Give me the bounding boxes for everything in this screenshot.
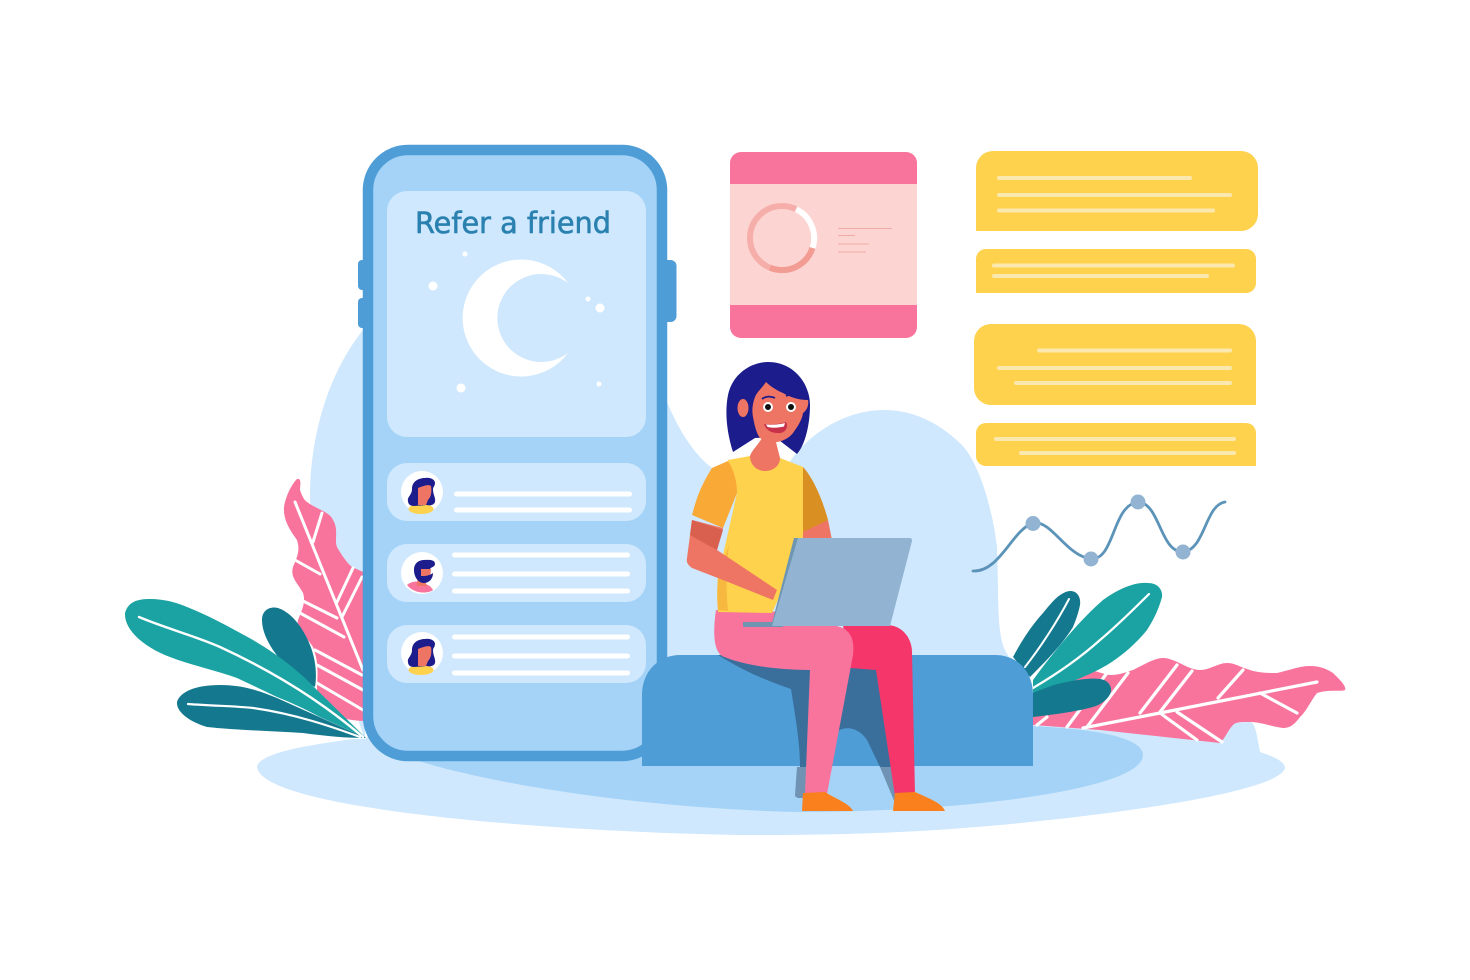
left big teal leaf (125, 599, 366, 738)
couch (642, 655, 1033, 766)
avatar: man (401, 552, 443, 594)
eyes (763, 402, 796, 412)
text lines (452, 634, 630, 676)
right teal leaf (1033, 583, 1162, 695)
avatar: woman (401, 632, 443, 675)
card body (730, 184, 917, 305)
chat bubble 3 (974, 324, 1256, 405)
phone screen panel (387, 191, 646, 437)
right low dark leaf (1033, 679, 1111, 717)
face (738, 382, 808, 442)
eyebrows (762, 395, 797, 399)
far arm (803, 520, 832, 540)
pink dashboard card (730, 152, 917, 338)
phone body (368, 150, 662, 756)
near arm (687, 520, 777, 600)
left pink leaf (284, 479, 370, 722)
floor ellipse mid (400, 726, 1143, 812)
heading: Refer a friend: Refer a friend (415, 206, 611, 240)
text lines (454, 492, 632, 512)
right dark leaf (1013, 591, 1080, 677)
avatar: woman (401, 471, 443, 514)
right pink leaf (1033, 658, 1345, 743)
floor ellipse light (257, 725, 1285, 835)
shirt (692, 456, 828, 613)
leg shadow (718, 650, 902, 803)
left low dark leaf (177, 685, 366, 738)
laptop (743, 538, 912, 627)
neck (750, 438, 780, 471)
front leg (714, 610, 853, 794)
card text lines (838, 228, 892, 252)
list row 2 (387, 544, 646, 602)
right plant (1013, 583, 1345, 743)
hair (726, 362, 810, 454)
list row 3 (387, 625, 646, 683)
icon: crescent moon (463, 260, 568, 377)
chat bubble 2 (976, 249, 1256, 293)
background blob (310, 330, 1285, 800)
phone side buttons (358, 260, 676, 328)
donut chart (750, 206, 814, 270)
back leg (843, 625, 915, 796)
woman on couch with laptop (687, 362, 945, 811)
card base with header and footer bands (730, 152, 917, 338)
chat bubble 4 (976, 423, 1256, 466)
chat bubble 1 (976, 151, 1258, 231)
line chart (973, 494, 1225, 571)
stars (428, 252, 604, 392)
left plant (125, 479, 370, 738)
text lines (452, 552, 630, 594)
phone (358, 150, 676, 756)
list row 1 (387, 463, 646, 521)
shoes (802, 792, 945, 811)
left small dark leaf (262, 608, 316, 687)
mouth (764, 422, 787, 433)
